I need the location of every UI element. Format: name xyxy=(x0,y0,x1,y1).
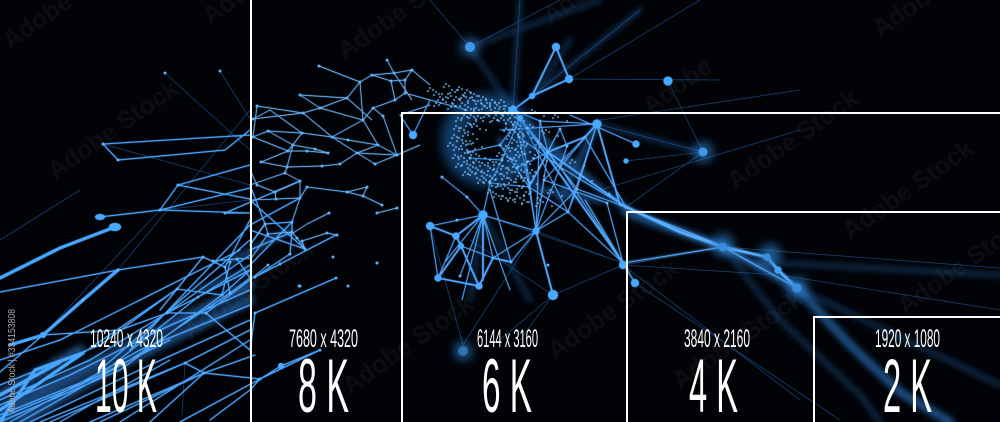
watermarks: Adobe Stock xyxy=(837,134,979,245)
network: central cluster lines xyxy=(400,47,636,300)
watermarks: Adobe xyxy=(637,52,717,120)
network: blurred halo nodes xyxy=(454,38,808,360)
label: 2K xyxy=(875,325,940,422)
network: dense cluster glow ring xyxy=(452,104,524,176)
watermarks: Adobe Stock xyxy=(722,84,864,195)
network: large nodes xyxy=(40,43,802,369)
network: dense particle cluster xyxy=(428,84,592,206)
label: 10K xyxy=(90,325,163,422)
network: upper-left web xyxy=(250,60,430,280)
frame: 8K divider xyxy=(250,0,252,422)
watermarks: Adobe Stock xyxy=(42,74,184,185)
infographic canvas: 10240 x 4320 xyxy=(90,325,163,353)
label: 4K xyxy=(684,325,750,422)
watermarks: Adobe Stock xyxy=(337,289,479,400)
resolution frames xyxy=(251,0,1000,422)
watermarks: Adobe Stock xyxy=(667,284,809,395)
network: right stream lines xyxy=(585,200,797,288)
watermarks: Adobe Stock xyxy=(177,234,319,345)
label: 8K: 7680 x 4320 xyxy=(289,325,358,353)
network: medium nodes xyxy=(83,60,626,379)
label: 6K xyxy=(477,325,538,422)
halo node cores xyxy=(458,42,708,356)
watermarks: Adobe xyxy=(7,337,87,405)
frame: 6K xyxy=(402,113,1000,422)
infographic canvas: 3840 x 2160 xyxy=(684,325,750,353)
network: lower-left bundle xyxy=(0,130,336,422)
frame: 4K xyxy=(627,212,1000,422)
side stock credit: Adobe Stock | #334153808 xyxy=(7,309,18,413)
watermarks: Adobe Stock xyxy=(542,254,684,365)
frame: 2K xyxy=(814,317,1000,422)
infographic canvas: 6144 x 3160 xyxy=(477,325,538,353)
label: 8K xyxy=(289,325,358,422)
